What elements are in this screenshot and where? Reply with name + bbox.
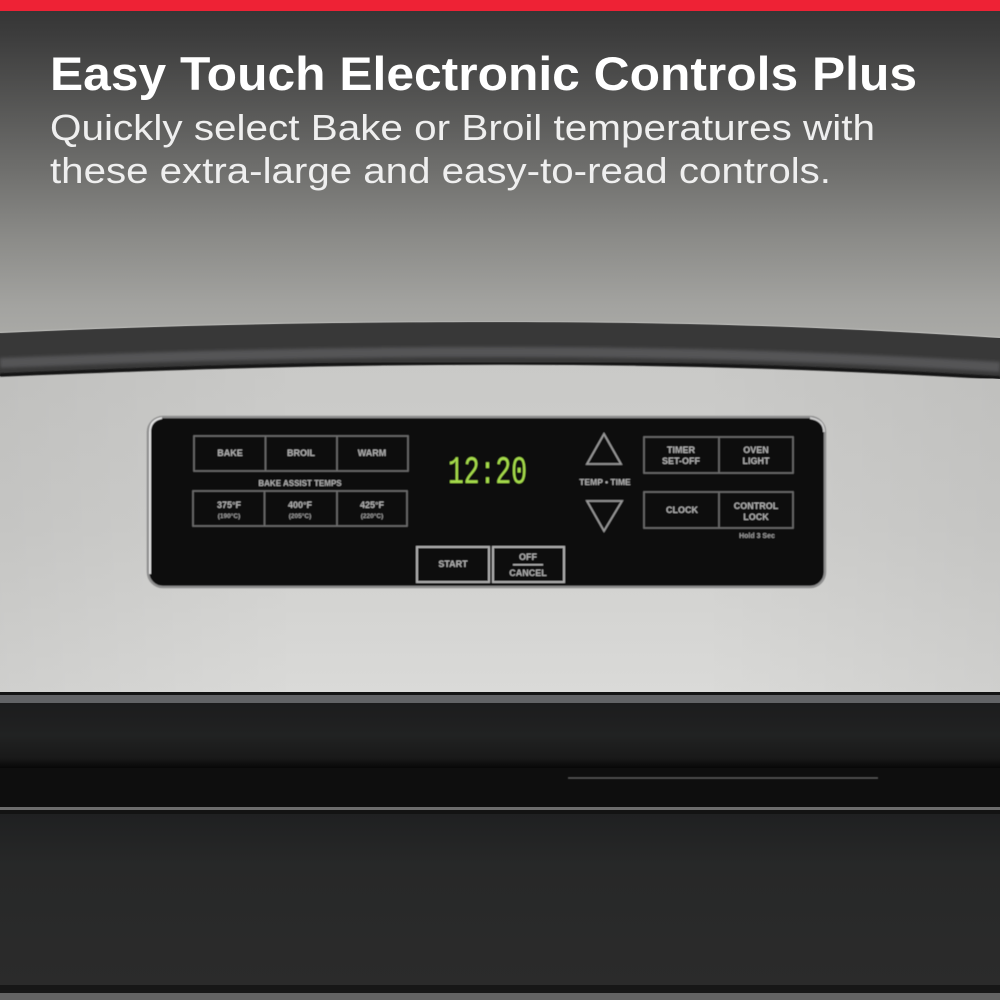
hold note: Hold 3 Sec	[739, 533, 775, 540]
start button	[417, 547, 489, 582]
control panel display	[148, 417, 825, 587]
start button: START	[438, 559, 468, 569]
subtitle	[50, 107, 875, 191]
bake assist temps label: BAKE ASSIST TEMPS	[258, 479, 342, 488]
timer and light buttons: OVEN	[743, 445, 769, 455]
subtitle: these extra-large and easy-to-read controls.	[50, 150, 831, 191]
background gradient	[0, 0, 1000, 345]
temperature buttons: 400°F	[288, 500, 313, 510]
clock display: 12:20	[448, 451, 527, 495]
title: Easy Touch Electronic Controls Plus	[50, 47, 917, 100]
timer and light buttons: SET-OFF	[662, 456, 701, 466]
timer and light buttons: TIMER	[667, 445, 695, 455]
temp time label: TEMP • TIME	[579, 477, 631, 487]
timer and light buttons: LIGHT	[742, 456, 770, 466]
top row buttons	[194, 436, 408, 471]
temperature buttons: 375°F	[217, 500, 242, 510]
timer and light buttons	[644, 437, 793, 473]
subtitle: Quickly select Bake or Broil temperatures with	[50, 107, 875, 148]
icon: down arrow	[587, 501, 622, 531]
temperature buttons: 425°F	[360, 500, 385, 510]
temperature buttons: (190°C)	[218, 512, 240, 520]
temperature buttons: (220°C)	[361, 512, 383, 520]
oven range illustration	[0, 322, 1000, 1000]
top row buttons: BAKE	[217, 448, 243, 458]
clock and lock buttons: CLOCK	[666, 505, 698, 515]
clock and lock buttons: CONTROL	[734, 501, 779, 511]
off cancel button: OFF	[519, 552, 537, 562]
temperature buttons	[193, 491, 407, 526]
top row buttons: BROIL	[287, 448, 316, 458]
stainless steel control panel	[0, 360, 1000, 694]
off cancel button: CANCEL	[509, 568, 547, 578]
icon: up arrow	[587, 434, 621, 464]
clock and lock buttons: LOCK	[743, 512, 769, 522]
lower dark band	[0, 692, 1000, 814]
off cancel button	[493, 547, 564, 582]
oven door	[0, 814, 1000, 1000]
temperature buttons: (205°C)	[289, 512, 311, 520]
clock and lock buttons	[644, 492, 793, 528]
dark top trim	[0, 322, 1000, 379]
top row buttons: WARM	[358, 448, 386, 458]
red top bar	[0, 0, 1000, 11]
